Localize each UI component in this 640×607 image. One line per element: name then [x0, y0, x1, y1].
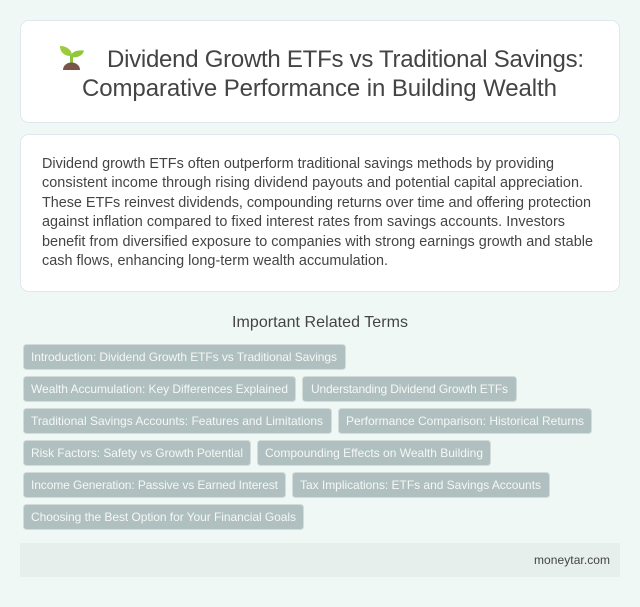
tag: risk	[24, 440, 250, 466]
tag: tax	[292, 472, 550, 498]
tag: traditional savings	[24, 408, 332, 434]
text block: summary paragraph: consistent income through rising dividend payouts and potential capital appreciation.	[42, 175, 583, 191]
tag: understanding	[302, 376, 516, 402]
tag: compounding: Compounding Effects on Wealth Building	[265, 446, 483, 460]
heading: related terms: Important Related Terms	[232, 314, 408, 331]
tag: understanding: Understanding Dividend Growth ETFs	[311, 382, 508, 396]
tag: introduction	[24, 344, 346, 370]
title: Comparative Performance in Building Wealth	[82, 75, 557, 102]
panel: summary	[20, 134, 620, 292]
title	[82, 46, 584, 102]
tag: income: Income Generation: Passive vs Earned Interest	[31, 478, 279, 492]
tag: choosing	[24, 504, 304, 530]
text block: summary paragraph: Dividend growth ETFs often outperform traditional savings methods by providing	[42, 156, 554, 172]
tag: income	[24, 472, 286, 498]
tag: traditional savings: Traditional Savings Accounts: Features and Limitations	[31, 414, 323, 428]
text block: summary paragraph: cash flows, enhancing long-term wealth accumulation.	[42, 253, 388, 269]
title: Dividend Growth ETFs vs Traditional Savings:	[107, 46, 584, 73]
tag: compounding	[258, 440, 490, 466]
text block: summary paragraph	[42, 156, 593, 269]
text block: summary paragraph: benefit from diversified exposure to companies with strong earnings growth and stable	[42, 234, 593, 250]
text block: summary paragraph: These ETFs reinvest dividends, compounding returns over time and offering protection	[42, 195, 591, 211]
tag: performance: Performance Comparison: Historical Returns	[346, 414, 584, 428]
text block: summary paragraph: against inflation compared to fixed interest rates from savings accounts. Investors	[42, 214, 565, 230]
tag: introduction: Introduction: Dividend Growth ETFs vs Traditional Savings	[31, 350, 337, 364]
panel: title card	[20, 20, 620, 122]
tag: choosing: Choosing the Best Option for Your Financial Goals	[31, 510, 296, 524]
footer text: moneytar.com	[534, 553, 610, 567]
icon: seedling	[60, 46, 84, 70]
tag: risk: Risk Factors: Safety vs Growth Potential	[31, 446, 243, 460]
tag list	[24, 344, 592, 530]
tag: wealth accumulation: Wealth Accumulation: Key Differences Explained	[31, 382, 288, 396]
tag: wealth accumulation	[24, 376, 296, 402]
tag: performance	[338, 408, 592, 434]
tag: tax: Tax Implications: ETFs and Savings Accounts	[300, 478, 541, 492]
footer	[20, 543, 620, 577]
